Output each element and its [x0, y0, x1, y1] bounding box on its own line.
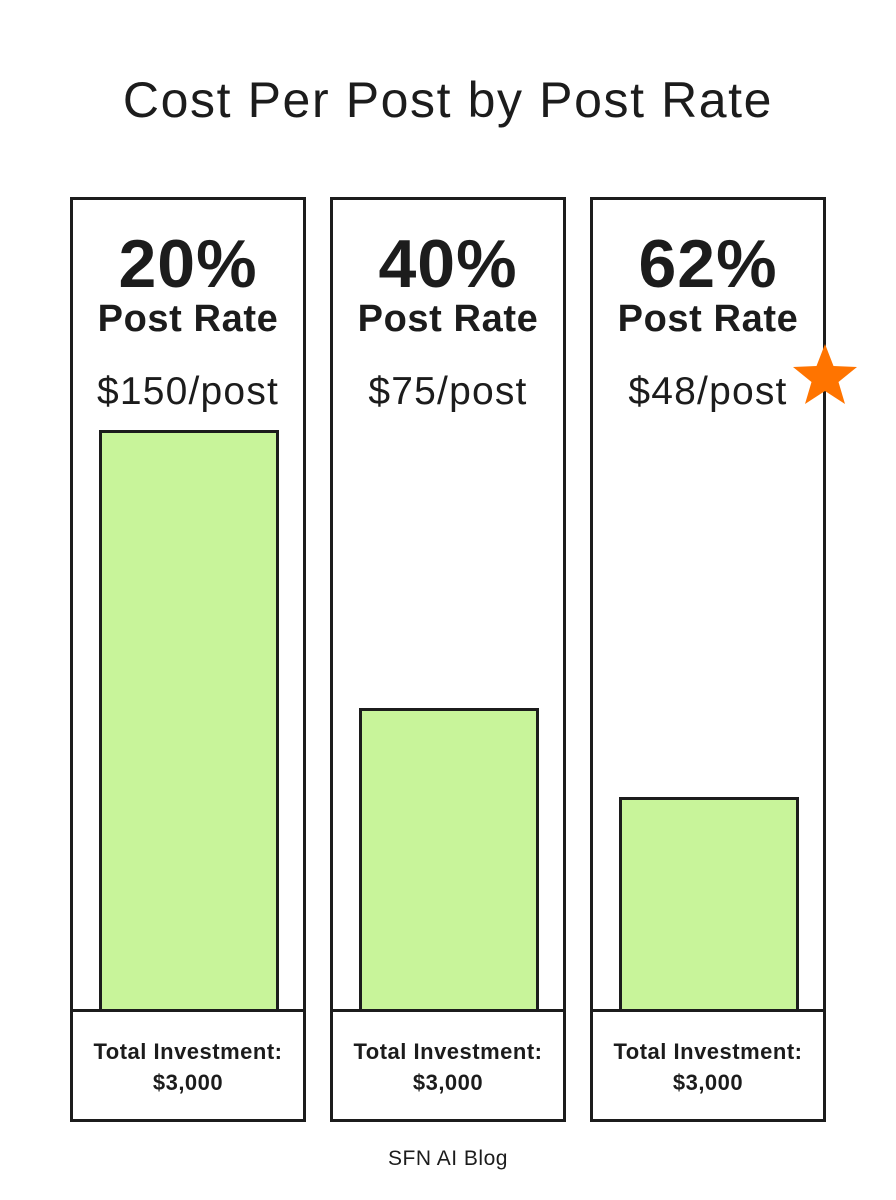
- percent: 20%: [118, 226, 258, 302]
- label: Post Rate: [98, 298, 278, 340]
- label: Post Rate: [358, 298, 538, 340]
- total investment: Total Investment:: [353, 1039, 542, 1064]
- total investment: $3,000: [413, 1070, 483, 1095]
- bar: [359, 708, 539, 1012]
- total investment: [73, 1009, 303, 1119]
- bar: [99, 430, 279, 1012]
- label: Post Rate: [618, 298, 798, 340]
- total investment: $3,000: [153, 1070, 223, 1095]
- percent: 62%: [638, 226, 778, 302]
- total investment: Total Investment:: [613, 1039, 802, 1064]
- panel: 20%: [70, 197, 306, 1122]
- credit: SFN AI Blog: [388, 1147, 508, 1170]
- title: Cost Per Post by Post Rate: [123, 72, 773, 128]
- panel: 62%: [590, 197, 826, 1122]
- cost: $75/post: [368, 370, 528, 413]
- total investment: Total Investment:: [93, 1039, 282, 1064]
- bar: [619, 797, 799, 1012]
- panel: 40%: [330, 197, 566, 1122]
- cost: $48/post: [628, 370, 788, 413]
- icon: star: [793, 344, 857, 404]
- total investment: $3,000: [673, 1070, 743, 1095]
- cost: $150/post: [97, 370, 279, 413]
- total investment: [593, 1009, 823, 1119]
- percent: 40%: [378, 226, 518, 302]
- total investment: [333, 1009, 563, 1119]
